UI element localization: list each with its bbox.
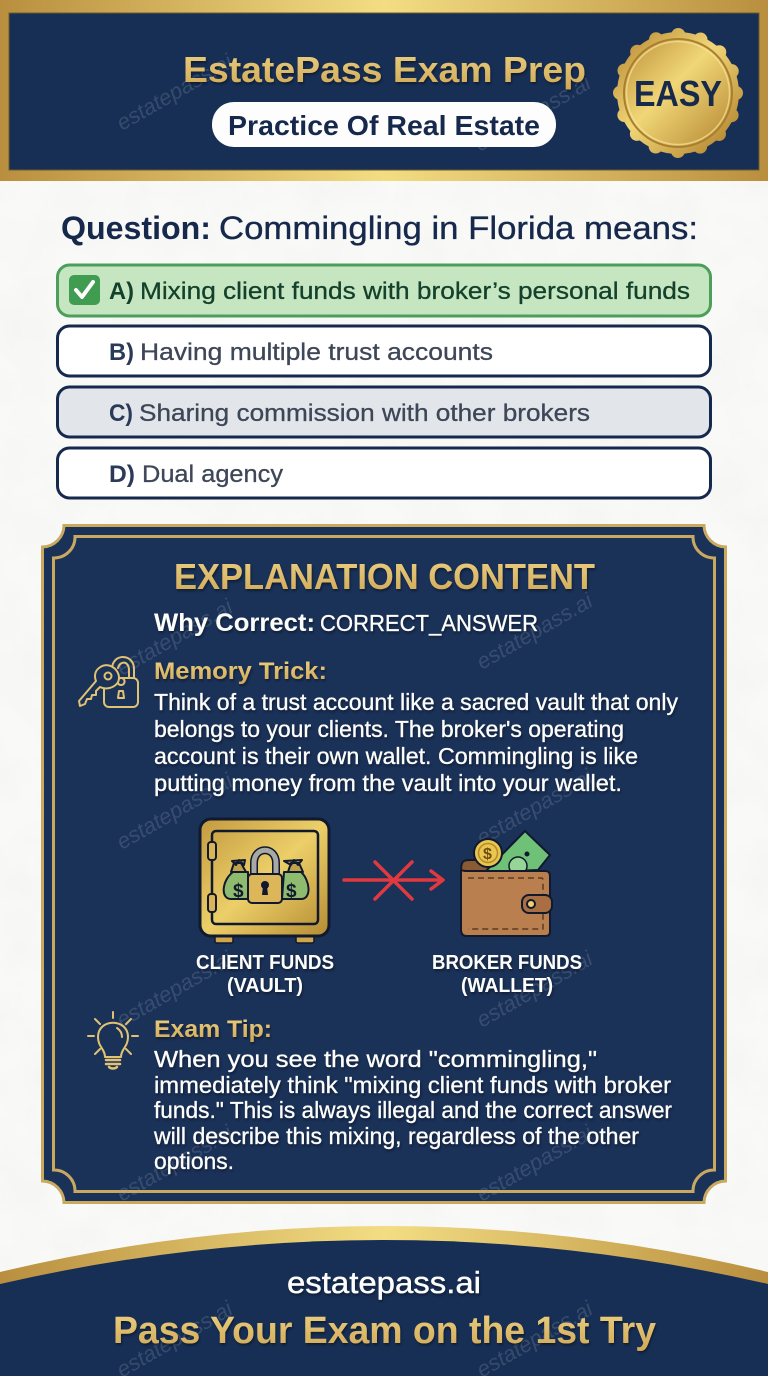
option A (correct): Mixing client funds with broker’s personal funds <box>140 278 690 305</box>
panel: explanation: estatepass.ai <box>472 587 598 674</box>
option D: Dual agency <box>142 461 283 488</box>
question heading: Commingling in Florida means: <box>219 210 698 246</box>
panel: explanation <box>42 526 726 1206</box>
icon: wallet: $ <box>483 846 492 863</box>
padlock <box>254 850 276 875</box>
badge: easy <box>617 32 739 154</box>
badge: easy: EASY <box>634 73 722 114</box>
title: EstatePass Exam Prep <box>183 49 586 90</box>
panel: explanation: estatepass.ai <box>472 945 598 1032</box>
option D: D) <box>109 461 135 488</box>
header banner <box>0 0 768 181</box>
icon: wallet <box>461 831 552 936</box>
memory trick text: belongs to your clients. The broker's operating <box>154 716 624 742</box>
question heading <box>61 210 698 246</box>
panel: explanation: estatepass.ai <box>112 1119 238 1206</box>
exam tip text <box>153 1016 672 1174</box>
arrow: blocked transfer <box>344 862 443 899</box>
exam tip text: will describe this mixing, regardless of the other <box>153 1123 639 1149</box>
icon: check box <box>69 275 100 305</box>
heading: explanation content: EXPLANATION CONTENT <box>174 556 595 597</box>
label: client funds: (VAULT) <box>227 975 303 997</box>
memory trick text: Think of a trust account like a sacred vault that only <box>154 689 678 715</box>
panel: explanation: estatepass.ai <box>472 763 598 850</box>
why correct line: Why Correct: <box>154 609 315 637</box>
label: broker funds: BROKER FUNDS <box>432 952 582 974</box>
exam tip text: funds." This is always illegal and the correct answer <box>154 1097 672 1123</box>
subtitle pill <box>212 102 556 147</box>
memory trick text: putting money from the vault into your wallet. <box>154 770 622 796</box>
memory trick text: Memory Trick: <box>154 658 327 685</box>
option B: Having multiple trust accounts <box>140 339 493 366</box>
icon: key and padlock <box>79 657 138 707</box>
icon: light bulb <box>88 1012 138 1068</box>
why correct line <box>154 609 538 637</box>
exam tip text: immediately think "mixing client funds with broker <box>154 1072 671 1098</box>
header banner: estatepass.ai <box>470 69 596 156</box>
subtitle pill: Practice Of Real Estate <box>228 110 540 141</box>
footer <box>0 1226 768 1376</box>
option C <box>58 387 710 437</box>
icon: vault: $ <box>233 881 244 902</box>
label: broker funds: (WALLET) <box>461 975 553 997</box>
label: broker funds <box>432 952 582 997</box>
why correct line: CORRECT_ANSWER <box>320 610 538 636</box>
option C: C) <box>109 400 133 427</box>
memory trick text: account is their own wallet. Commingling is like <box>154 743 638 769</box>
website: estatepass.ai <box>287 1265 481 1300</box>
option A (correct) <box>58 265 710 316</box>
exam tip text: When you see the word "commingling," <box>154 1046 597 1072</box>
icon: vault <box>200 819 329 943</box>
option D <box>58 448 710 498</box>
option C: Sharing commission with other brokers <box>139 400 590 427</box>
question heading: Question: <box>61 210 211 246</box>
panel: explanation: estatepass.ai <box>112 945 238 1032</box>
icon: vault: $ <box>286 881 297 902</box>
header banner: estatepass.ai <box>112 48 238 135</box>
exam tip text: Exam Tip: <box>154 1016 272 1043</box>
option B: B) <box>109 339 134 366</box>
option A (correct): A) <box>109 278 134 305</box>
exam tip text: options. <box>154 1148 234 1174</box>
panel: explanation: estatepass.ai <box>112 767 238 854</box>
memory trick text <box>154 658 678 796</box>
label: client funds <box>196 952 334 997</box>
label: client funds: CLIENT FUNDS <box>196 952 334 974</box>
option B <box>58 326 710 376</box>
money bags <box>224 860 309 899</box>
panel: explanation: estatepass.ai <box>112 593 238 680</box>
panel: explanation: estatepass.ai <box>472 1119 598 1206</box>
slogan: Pass Your Exam on the 1st Try <box>113 1310 656 1352</box>
